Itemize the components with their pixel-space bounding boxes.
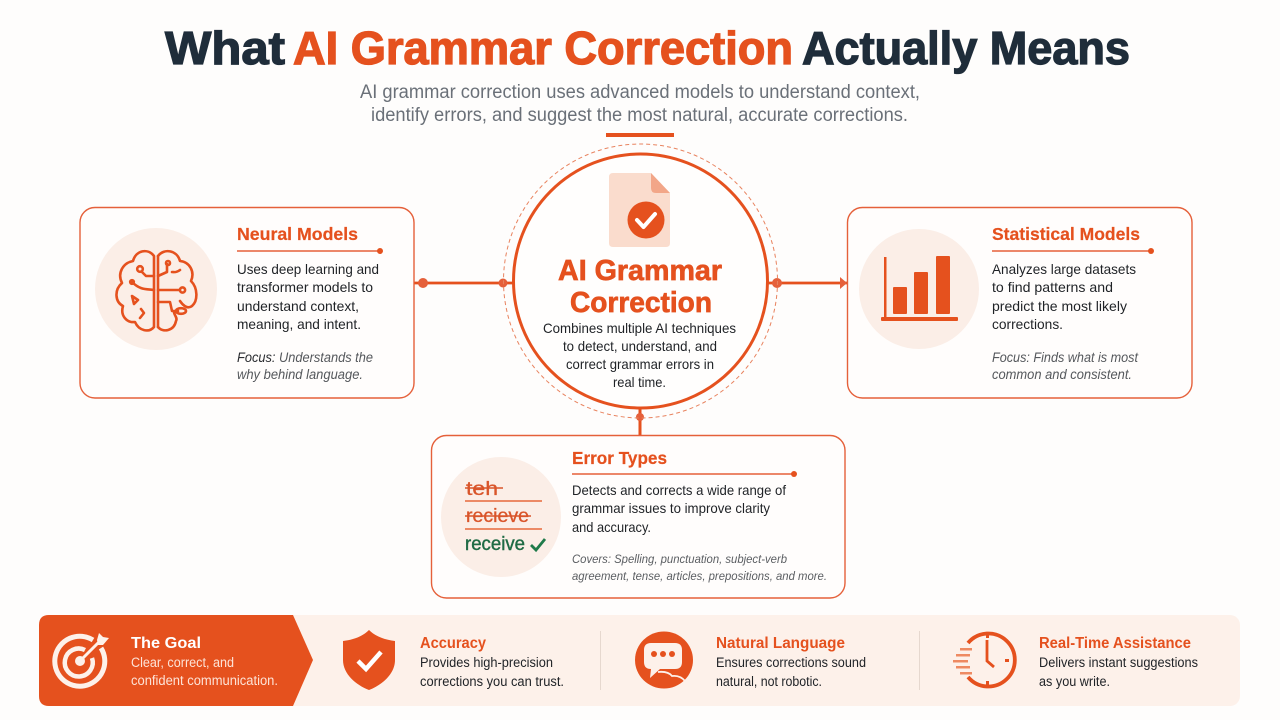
item: accuracy: Provides high-precision	[420, 655, 553, 670]
description: transformer models to	[237, 279, 373, 295]
focus note: Focus: Understands the	[237, 350, 373, 365]
description: Detects and corrects a wide range of	[572, 482, 786, 498]
focus note	[992, 350, 1139, 382]
description	[237, 261, 379, 332]
covers note: agreement, tense, articles, prepositions, and more.	[572, 569, 827, 583]
focus note	[237, 350, 373, 382]
center description: real time.	[613, 374, 666, 390]
panel: statistical models	[848, 208, 1192, 398]
title underline	[606, 133, 674, 137]
heading rule	[237, 248, 383, 254]
icon: spelling corrections: teh	[466, 479, 498, 500]
focus note: Focus: Finds what is most	[992, 350, 1139, 365]
icon: shield check	[343, 630, 395, 690]
title: Actually Means	[802, 22, 1130, 74]
the goal text: confident communication.	[131, 673, 278, 688]
subtitle: AI grammar correction uses advanced models to understand context,	[360, 82, 920, 103]
panel: error types	[432, 436, 845, 598]
heading: neural models: Neural Models	[237, 224, 358, 244]
item: real-time assistance: Real-Time Assistance	[1039, 635, 1191, 652]
title: What	[165, 22, 285, 74]
description	[572, 482, 786, 535]
item: real-time assistance: as you write.	[1039, 674, 1110, 689]
connector: neural models to center	[414, 278, 513, 288]
description	[992, 261, 1136, 332]
heading: statistical models: Statistical Models	[992, 224, 1140, 244]
connector: center to statistical models	[768, 277, 847, 289]
description: to find patterns and	[992, 279, 1113, 295]
icon: bar chart	[859, 229, 979, 349]
bottom band	[39, 615, 1240, 706]
item: natural language	[635, 632, 866, 689]
item: natural language: natural, not robotic.	[716, 674, 822, 689]
icon: speech bubble	[635, 632, 693, 688]
covers note	[572, 552, 827, 583]
item: natural language: Natural Language	[716, 635, 845, 652]
icon: brain	[95, 228, 217, 350]
the goal text	[131, 635, 278, 688]
title	[165, 22, 1130, 74]
item: accuracy	[343, 630, 564, 690]
center heading: AI Grammar	[558, 255, 722, 287]
title: AI Grammar Correction	[293, 22, 793, 74]
description: understand context,	[237, 298, 359, 314]
icon: target	[55, 633, 109, 686]
icon: clock with speed lines	[953, 633, 1015, 686]
description: predict the most likely	[992, 298, 1127, 314]
center heading	[558, 255, 722, 319]
icon: spelling corrections	[441, 457, 561, 577]
description: corrections.	[992, 316, 1063, 332]
icon: spelling corrections: receive	[465, 534, 525, 555]
item: accuracy: corrections you can trust.	[420, 674, 564, 689]
center heading: Correction	[570, 287, 712, 319]
panel: the goal	[39, 615, 313, 706]
item: real-time assistance: Delivers instant suggestions	[1039, 655, 1198, 670]
description: Uses deep learning and	[237, 261, 379, 277]
description: meaning, and intent.	[237, 316, 361, 332]
panel: neural models	[80, 208, 414, 398]
heading rule	[572, 471, 797, 477]
covers note: Covers: Spelling, punctuation, subject-verb	[572, 552, 787, 566]
panel: center circle	[504, 144, 778, 418]
connector: center to error types	[636, 407, 644, 436]
icon: document with check	[609, 173, 670, 247]
the goal text: Clear, correct, and	[131, 655, 234, 670]
focus note: why behind language.	[237, 367, 363, 382]
description: grammar issues to improve clarity	[572, 500, 770, 516]
item: natural language: Ensures corrections sound	[716, 655, 866, 670]
center description: correct grammar errors in	[566, 356, 714, 372]
item: real-time assistance	[953, 633, 1198, 689]
center description: Combines multiple AI techniques	[543, 320, 736, 336]
heading rule	[992, 248, 1154, 254]
focus note: common and consistent.	[992, 367, 1132, 382]
icon: spelling corrections: recieve	[466, 506, 529, 527]
subtitle: identify errors, and suggest the most natural, accurate corrections.	[371, 105, 908, 126]
heading: error types: Error Types	[572, 448, 667, 468]
description: Analyzes large datasets	[992, 261, 1136, 277]
the goal text: The Goal	[131, 635, 201, 652]
description: and accuracy.	[572, 519, 651, 535]
center description	[543, 320, 736, 390]
item: accuracy: Accuracy	[420, 635, 486, 652]
subtitle	[360, 82, 920, 126]
center description: to detect, understand, and	[563, 338, 717, 354]
